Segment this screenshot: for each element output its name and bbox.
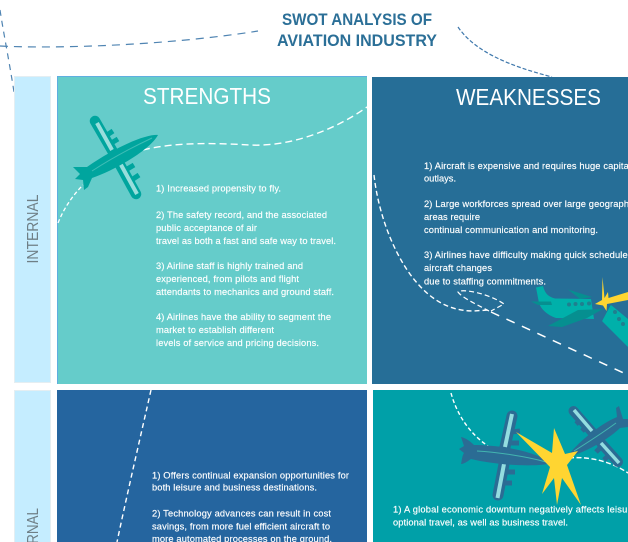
icon: plane left (459, 414, 552, 498)
text: strengths list: 2) The safety record, and the associated (156, 210, 327, 220)
title: AVIATION INDUSTRY (277, 32, 437, 50)
text: opportunities list: 1) Offers continual expansion opportunities for (152, 470, 349, 480)
dashed flight path: top right (458, 27, 552, 77)
text: strengths list: 3) Airline staff is highly trained and (156, 261, 303, 271)
dashed flight path: weaknesses (374, 175, 628, 375)
text: opportunities list: 2) Technology advances can result in cost (152, 508, 331, 518)
text: opportunities list (152, 470, 349, 542)
icon: plane right (566, 406, 628, 463)
dashed flight path: strengths (58, 107, 367, 223)
heading: weaknesses: WEAKNESSES (456, 84, 601, 110)
text: strengths list: public acceptance of air (156, 223, 257, 233)
panel: strengths (57, 76, 367, 384)
panel: opportunities (57, 390, 367, 542)
side label: external (14, 390, 50, 542)
text: weaknesses list (424, 161, 628, 286)
text: threats list (393, 504, 628, 528)
dashed flight path: threats (451, 393, 628, 473)
text: opportunities list: savings, from more fuel efficient aircraft to (152, 522, 330, 532)
text: strengths list: attendants to mechanics and ground staff. (156, 287, 334, 297)
icon: broken plane (531, 277, 628, 346)
dashed flight path: top left (0, 10, 258, 92)
title: SWOT ANALYSIS OF (282, 11, 432, 29)
text: strengths list: experienced, from pilots and flight (156, 274, 299, 284)
text: weaknesses list: aircraft changes (424, 263, 492, 273)
text: threats list: optional travel, as well as business travel. (393, 518, 568, 528)
icon: plane (73, 121, 158, 194)
panel: threats (373, 390, 628, 542)
panel: weaknesses (372, 77, 628, 384)
text: strengths list: 1) Increased propensity to fly. (156, 184, 281, 194)
text: weaknesses list: outlays. (424, 174, 456, 184)
dashed flight path: opportunities (117, 390, 151, 542)
side label: internal (14, 76, 50, 382)
text: strengths list (156, 184, 336, 348)
side label: internal: INTERNAL (25, 194, 42, 264)
text: weaknesses list: continual communication and monitoring. (424, 225, 598, 235)
text: strengths list: travel as both a fast and safe way to travel. (156, 236, 336, 246)
text: opportunities list: both leisure and business destinations. (152, 482, 317, 492)
title (277, 11, 437, 50)
text: strengths list: market to establish different (156, 325, 274, 335)
text: weaknesses list: 1) Aircraft is expensive and requires huge capital (424, 161, 628, 171)
text: weaknesses list: areas require (424, 212, 480, 222)
heading: strengths: STRENGTHS (143, 83, 271, 109)
text: strengths list: levels of service and pricing decisions. (156, 338, 319, 348)
text: strengths list: 4) Airlines have the ability to segment the (156, 312, 331, 322)
text: weaknesses list: due to staffing commitments. (424, 276, 546, 286)
icon: collision burst (516, 428, 581, 505)
